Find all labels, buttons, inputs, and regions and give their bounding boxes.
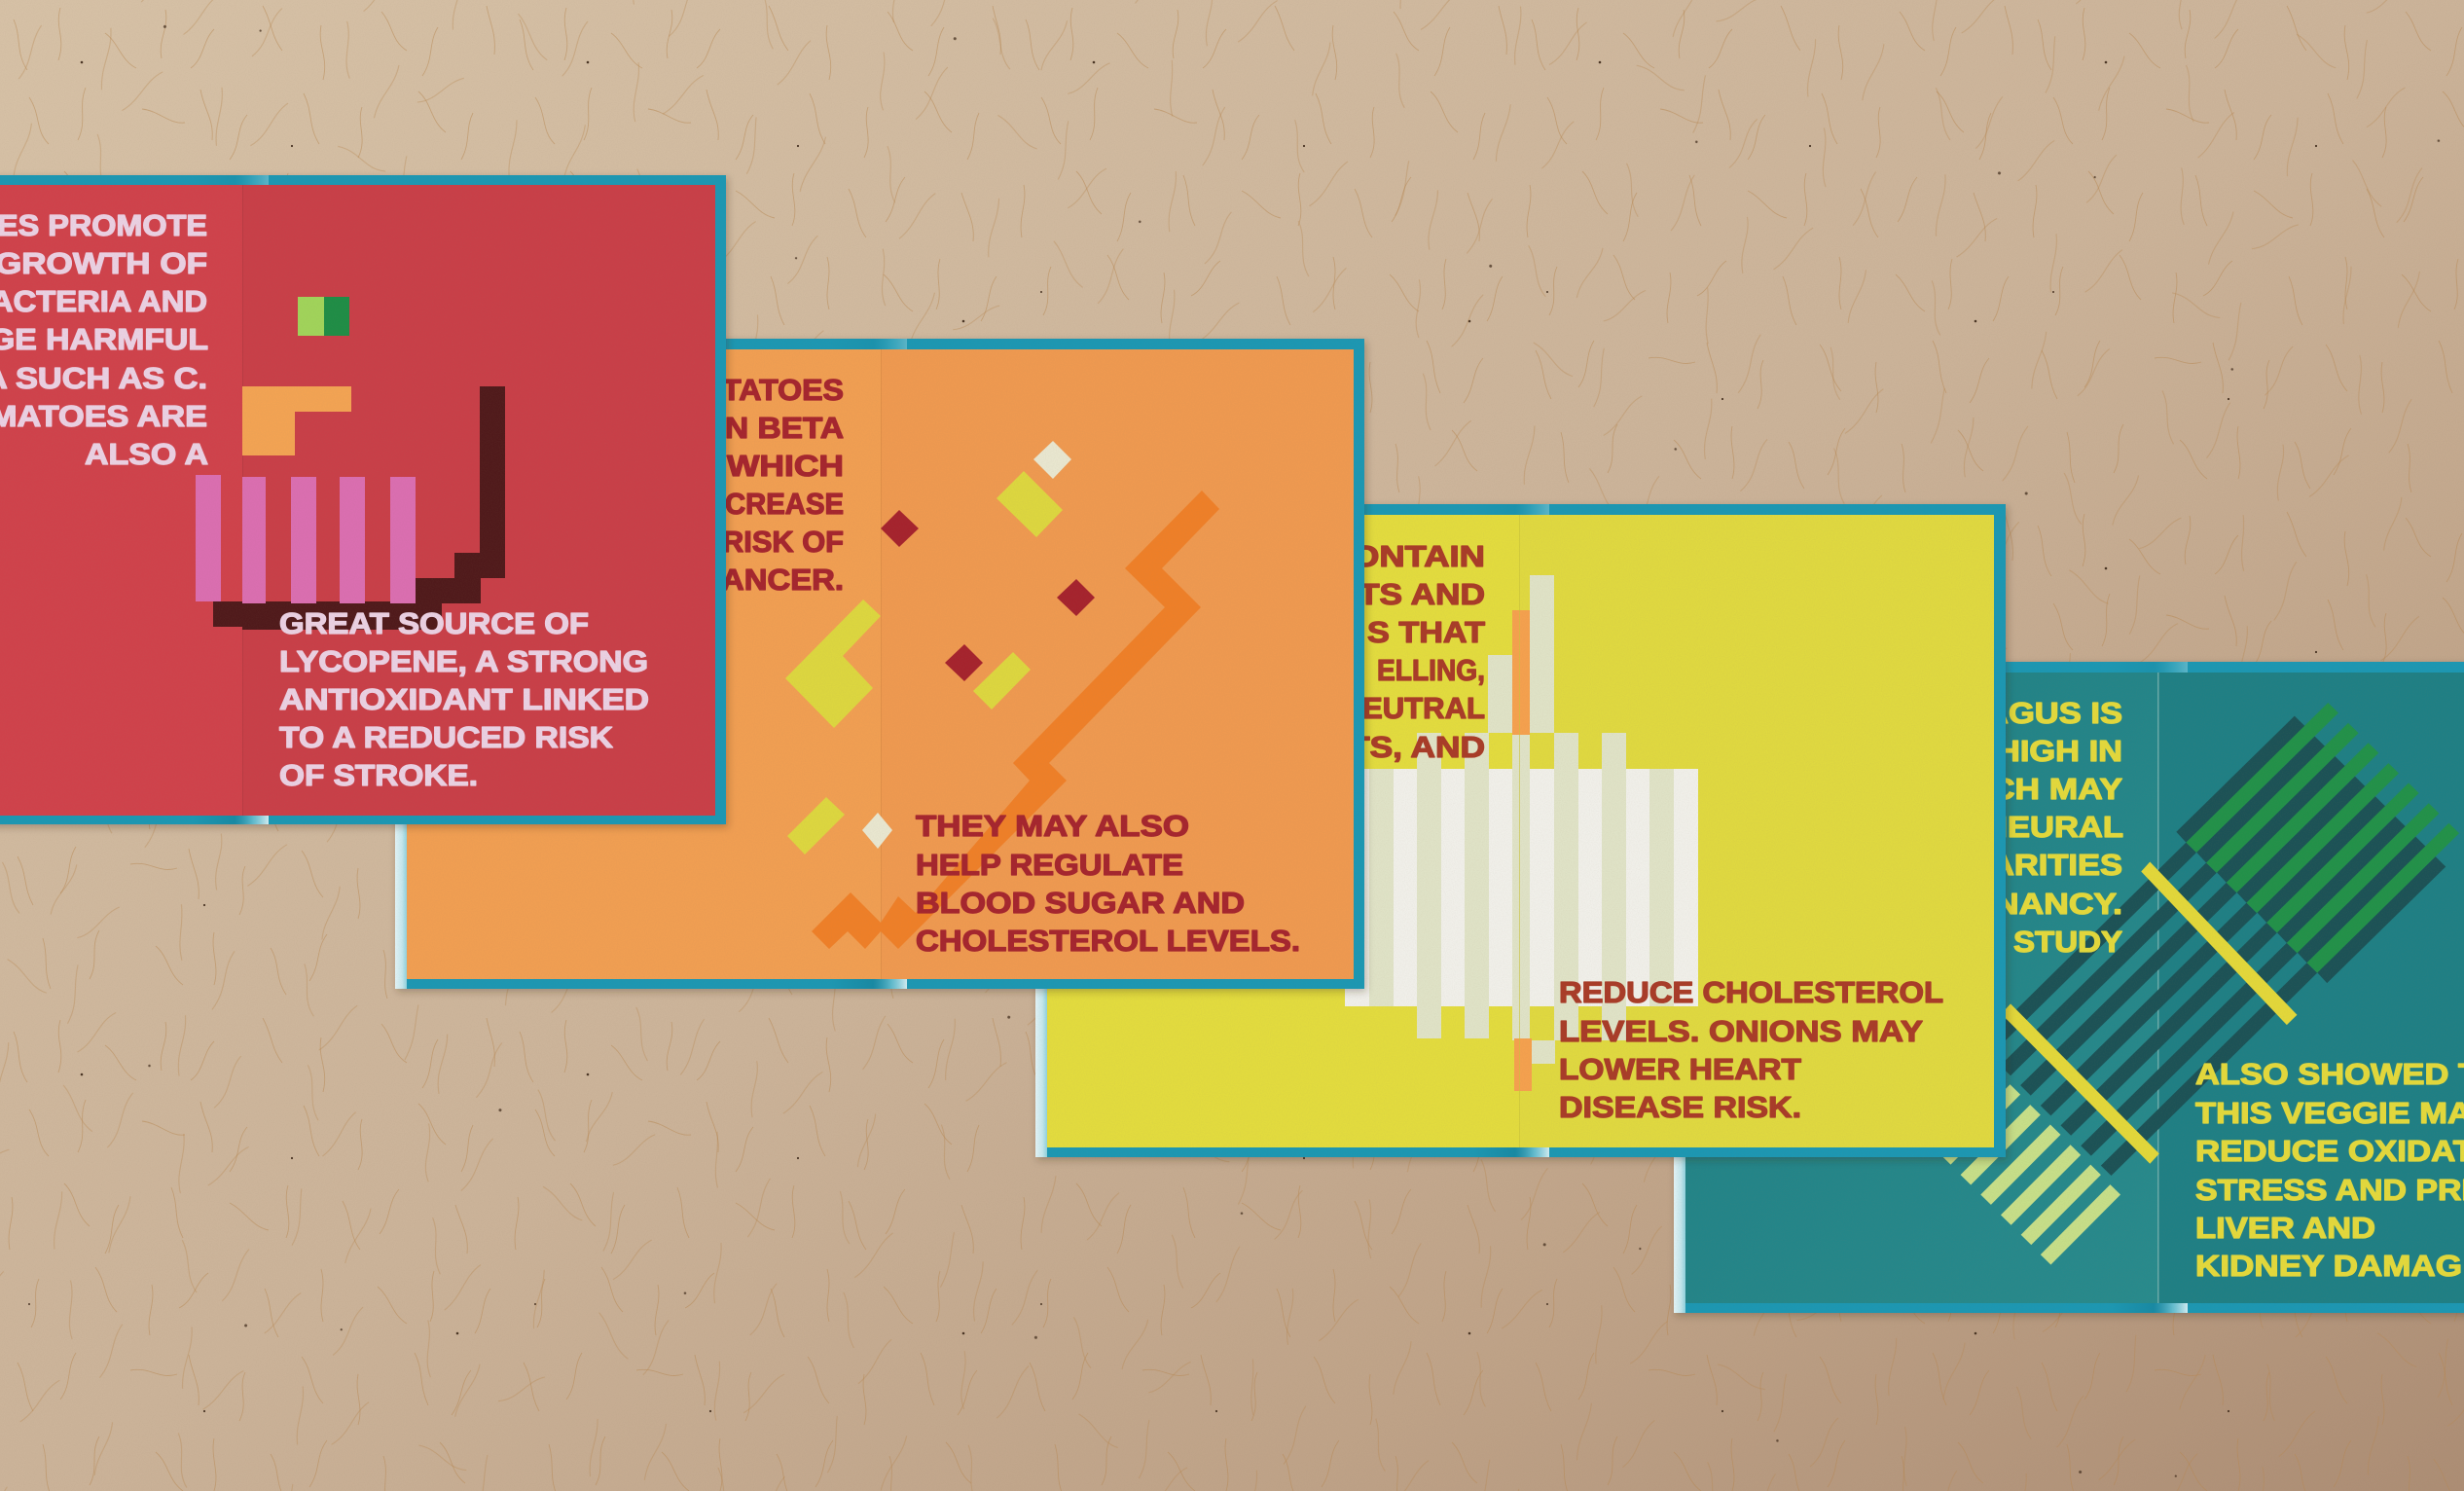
teal left page text: AGUS IS xyxy=(1984,697,2122,730)
teal right page text: REDUCE OXIDAT xyxy=(2195,1135,2464,1168)
yellow left page text: ELLING, xyxy=(1377,654,1485,687)
red right page text: GREAT SOURCE OF xyxy=(279,607,589,640)
asparagus illustration xyxy=(1940,703,2459,1264)
orange left page text: RISK OF xyxy=(722,526,844,559)
orange zigzag line xyxy=(812,491,1219,949)
yellow right page text: DISEASE RISK. xyxy=(1559,1091,1801,1124)
teal right page text: KIDNEY DAMAG xyxy=(2195,1250,2462,1283)
onion white bars xyxy=(1345,769,1698,1006)
onion illustration xyxy=(1345,575,1698,1091)
booklet: onions (yellow) xyxy=(1035,504,2006,1157)
tomato stem square xyxy=(298,297,349,336)
teal booklet right page xyxy=(2158,673,2464,1303)
red right page text: TO A REDUCED RISK xyxy=(279,721,613,754)
teal left page text: HIGH IN xyxy=(1996,735,2122,768)
yellow left page text: ONTAIN xyxy=(1352,540,1485,573)
yellow left page text: EUTRAL xyxy=(1362,692,1485,725)
onion sage bars xyxy=(1369,575,1674,1064)
orange left page text: WHICH xyxy=(727,450,844,483)
red left page text: ALSO A xyxy=(85,438,208,471)
red right page text: ANTIOXIDANT LINKED xyxy=(279,683,649,716)
teal left page text: ARITIES xyxy=(1990,849,2122,882)
onion orange bars xyxy=(1512,610,1532,1091)
yellow left page text: TS, AND xyxy=(1349,731,1485,764)
red booklet left page xyxy=(0,185,242,816)
orange booklet right page xyxy=(881,349,1354,979)
teal left page text xyxy=(1983,697,2123,959)
orange left page text: TATOES xyxy=(722,374,844,407)
red left page text xyxy=(0,209,208,471)
yellow right page text: LEVELS. ONIONS MAY xyxy=(1559,1015,1923,1048)
teal right page text: STRESS AND PRE xyxy=(2195,1174,2464,1207)
orange left page text: ANCER. xyxy=(721,564,844,597)
orange right page text: HELP REGULATE xyxy=(916,849,1183,882)
teal left page text: NEURAL xyxy=(1983,811,2123,844)
asparagus upper dark stripes xyxy=(2176,716,2446,983)
tomato pink bars xyxy=(196,475,416,603)
asparagus yellow band 2 xyxy=(2001,1003,2159,1164)
asparagus yellow band 1 xyxy=(2141,862,2297,1025)
orange right page text: CHOLESTEROL LEVELS. xyxy=(916,925,1300,958)
red left page text: ES PROMOTE xyxy=(0,209,207,242)
orange booklet cover xyxy=(395,339,1364,989)
yellow booklet left page xyxy=(1047,515,1519,1147)
teal booklet left page xyxy=(1685,673,2158,1303)
orange left page text xyxy=(721,374,844,597)
teal right page text xyxy=(2195,1058,2464,1283)
yellow booklet right page xyxy=(1519,515,1994,1147)
teal right page text: ALSO SHOWED T xyxy=(2195,1058,2464,1091)
booklet: sweet potatoes (orange) xyxy=(395,339,1364,989)
red right page text xyxy=(279,607,649,792)
asparagus pale stripe tips xyxy=(1940,1084,2120,1264)
yellow right page text xyxy=(1559,976,1943,1124)
yellow booklet cover xyxy=(1035,504,2006,1157)
asparagus lower dark stripes xyxy=(1980,843,2317,1176)
booklet: tomatoes (red) xyxy=(0,175,726,824)
booklet: asparagus (teal) xyxy=(1674,662,2464,1313)
orange left page text: N BETA xyxy=(725,412,844,445)
orange right page text: BLOOD SUGAR AND xyxy=(916,887,1245,920)
asparagus green stripes xyxy=(2186,703,2459,973)
yellow right page text: REDUCE CHOLESTEROL xyxy=(1559,976,1943,1009)
teal right page text: THIS VEGGIE MA xyxy=(2195,1097,2464,1130)
yellow left page text xyxy=(1349,540,1485,764)
orange left page text: CREASE xyxy=(725,488,844,521)
orange booklet left page xyxy=(407,349,881,979)
red right page text: LYCOPENE, A STRONG xyxy=(279,645,648,678)
red booklet right page xyxy=(242,185,715,816)
teal left page text: STUDY xyxy=(2013,926,2122,959)
yellow left page text: TS AND xyxy=(1359,578,1485,611)
red left page text: GROWTH OF xyxy=(0,247,207,280)
yellow right page text: LOWER HEART xyxy=(1559,1053,1801,1086)
teal left page text: CH MAY xyxy=(1990,773,2122,806)
teal booklet cover xyxy=(1674,662,2464,1313)
orange right page text: THEY MAY ALSO xyxy=(916,810,1189,843)
red right page text: OF STROKE. xyxy=(279,759,478,792)
tomato dark outline xyxy=(213,386,505,630)
yellow left page text: S THAT xyxy=(1367,616,1485,649)
teal right page text: LIVER AND xyxy=(2195,1212,2375,1245)
orange right page text xyxy=(916,810,1300,958)
diamonds xyxy=(785,441,1095,855)
red booklet cover xyxy=(0,175,726,824)
teal left page text: NANCY. xyxy=(1994,888,2122,921)
tomato orange corner xyxy=(242,386,351,455)
